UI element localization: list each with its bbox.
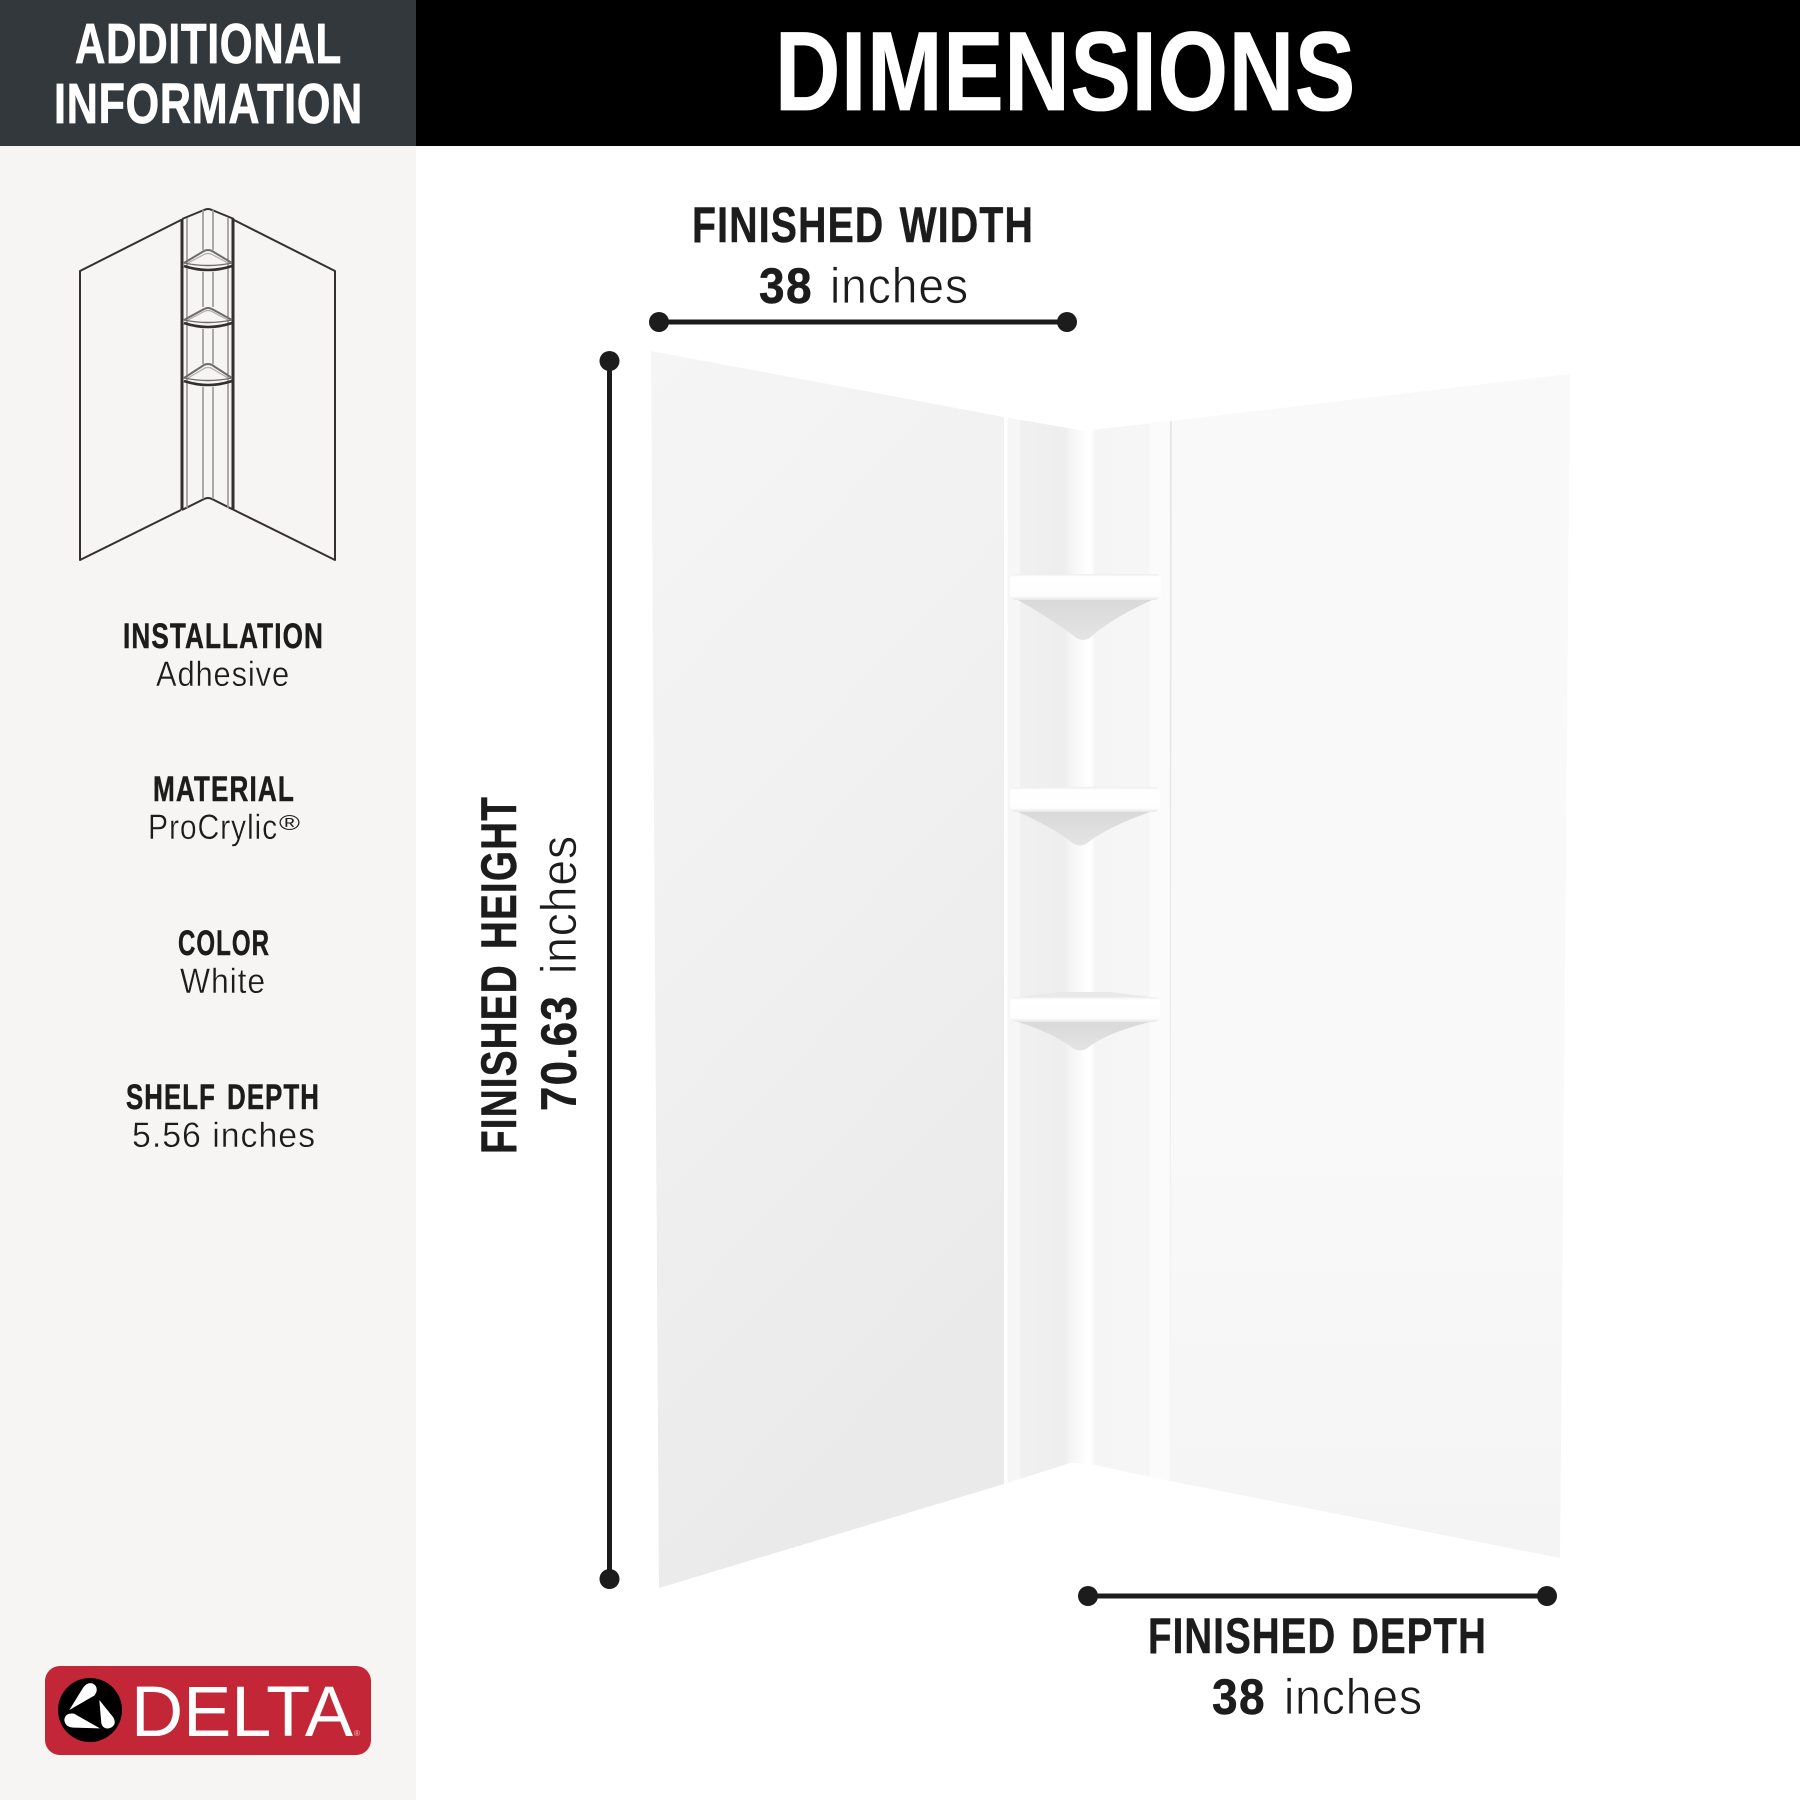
- icon: line drawing of corner wall set: [80, 209, 335, 560]
- shelf outlines: [184, 250, 232, 385]
- title: dimensions: DIMENSIONS: [775, 9, 1356, 134]
- height label: [471, 796, 587, 1154]
- spec: shelf depth: SHELF DEPTH: [126, 1078, 320, 1117]
- icon: delta emblem: [58, 1678, 122, 1742]
- header bar: dimensions: [416, 0, 1800, 146]
- spec: installation: [123, 617, 324, 694]
- dimension: finished width: FINISHED WIDTH: [692, 197, 1034, 253]
- arrow: width line: [649, 312, 1077, 332]
- arrow: height line: [600, 351, 620, 1589]
- dimension: finished depth: FINISHED DEPTH: [1148, 1608, 1487, 1664]
- spec: material: [148, 770, 301, 847]
- shelf 2: [1010, 787, 1160, 846]
- logo: delta: ®: [354, 1729, 360, 1738]
- dimension: finished depth: 38: [1212, 1669, 1266, 1725]
- spec: shelf depth: 5.56 inches: [132, 1116, 316, 1155]
- arrow: depth line: [1078, 1586, 1557, 1606]
- dimension: finished depth: inches: [1284, 1669, 1423, 1725]
- center corner strip: [1004, 417, 1172, 1484]
- wordmark: DELTA: [131, 1673, 354, 1752]
- spec: color: White: [180, 962, 266, 1001]
- right wall panel: [1170, 374, 1570, 1558]
- sidebar panel: [0, 0, 416, 1800]
- dimension: finished depth: [1078, 1586, 1557, 1725]
- dimension: finished height: [471, 351, 620, 1589]
- dimension: finished width: inches: [830, 258, 969, 314]
- height label: FINISHED HEIGHT: [471, 796, 527, 1154]
- header: additional information: [0, 0, 416, 146]
- spec: installation: INSTALLATION: [123, 617, 324, 656]
- shelf 1: [1010, 574, 1161, 640]
- header: additional information: ADDITIONAL: [75, 12, 342, 76]
- height label: inches: [531, 835, 587, 974]
- spec: color: [178, 924, 270, 1001]
- spec: installation: Adhesive: [156, 655, 290, 694]
- spec: material: MATERIAL: [153, 770, 295, 809]
- spec: material: ProCrylic: [148, 808, 278, 847]
- spec: shelf depth: [126, 1078, 320, 1155]
- header: additional information: INFORMATION: [54, 72, 363, 136]
- logo: delta: [45, 1666, 371, 1755]
- spec: color: COLOR: [178, 924, 270, 963]
- left wall panel: [651, 351, 1004, 1588]
- height label: 70.63: [531, 995, 587, 1111]
- spec: material: ®: [279, 812, 301, 835]
- product: corner wall panels: [651, 351, 1570, 1588]
- shelf 3: [1010, 992, 1160, 1050]
- dimension: finished width: [649, 197, 1077, 332]
- dimension: finished width: 38: [759, 258, 813, 314]
